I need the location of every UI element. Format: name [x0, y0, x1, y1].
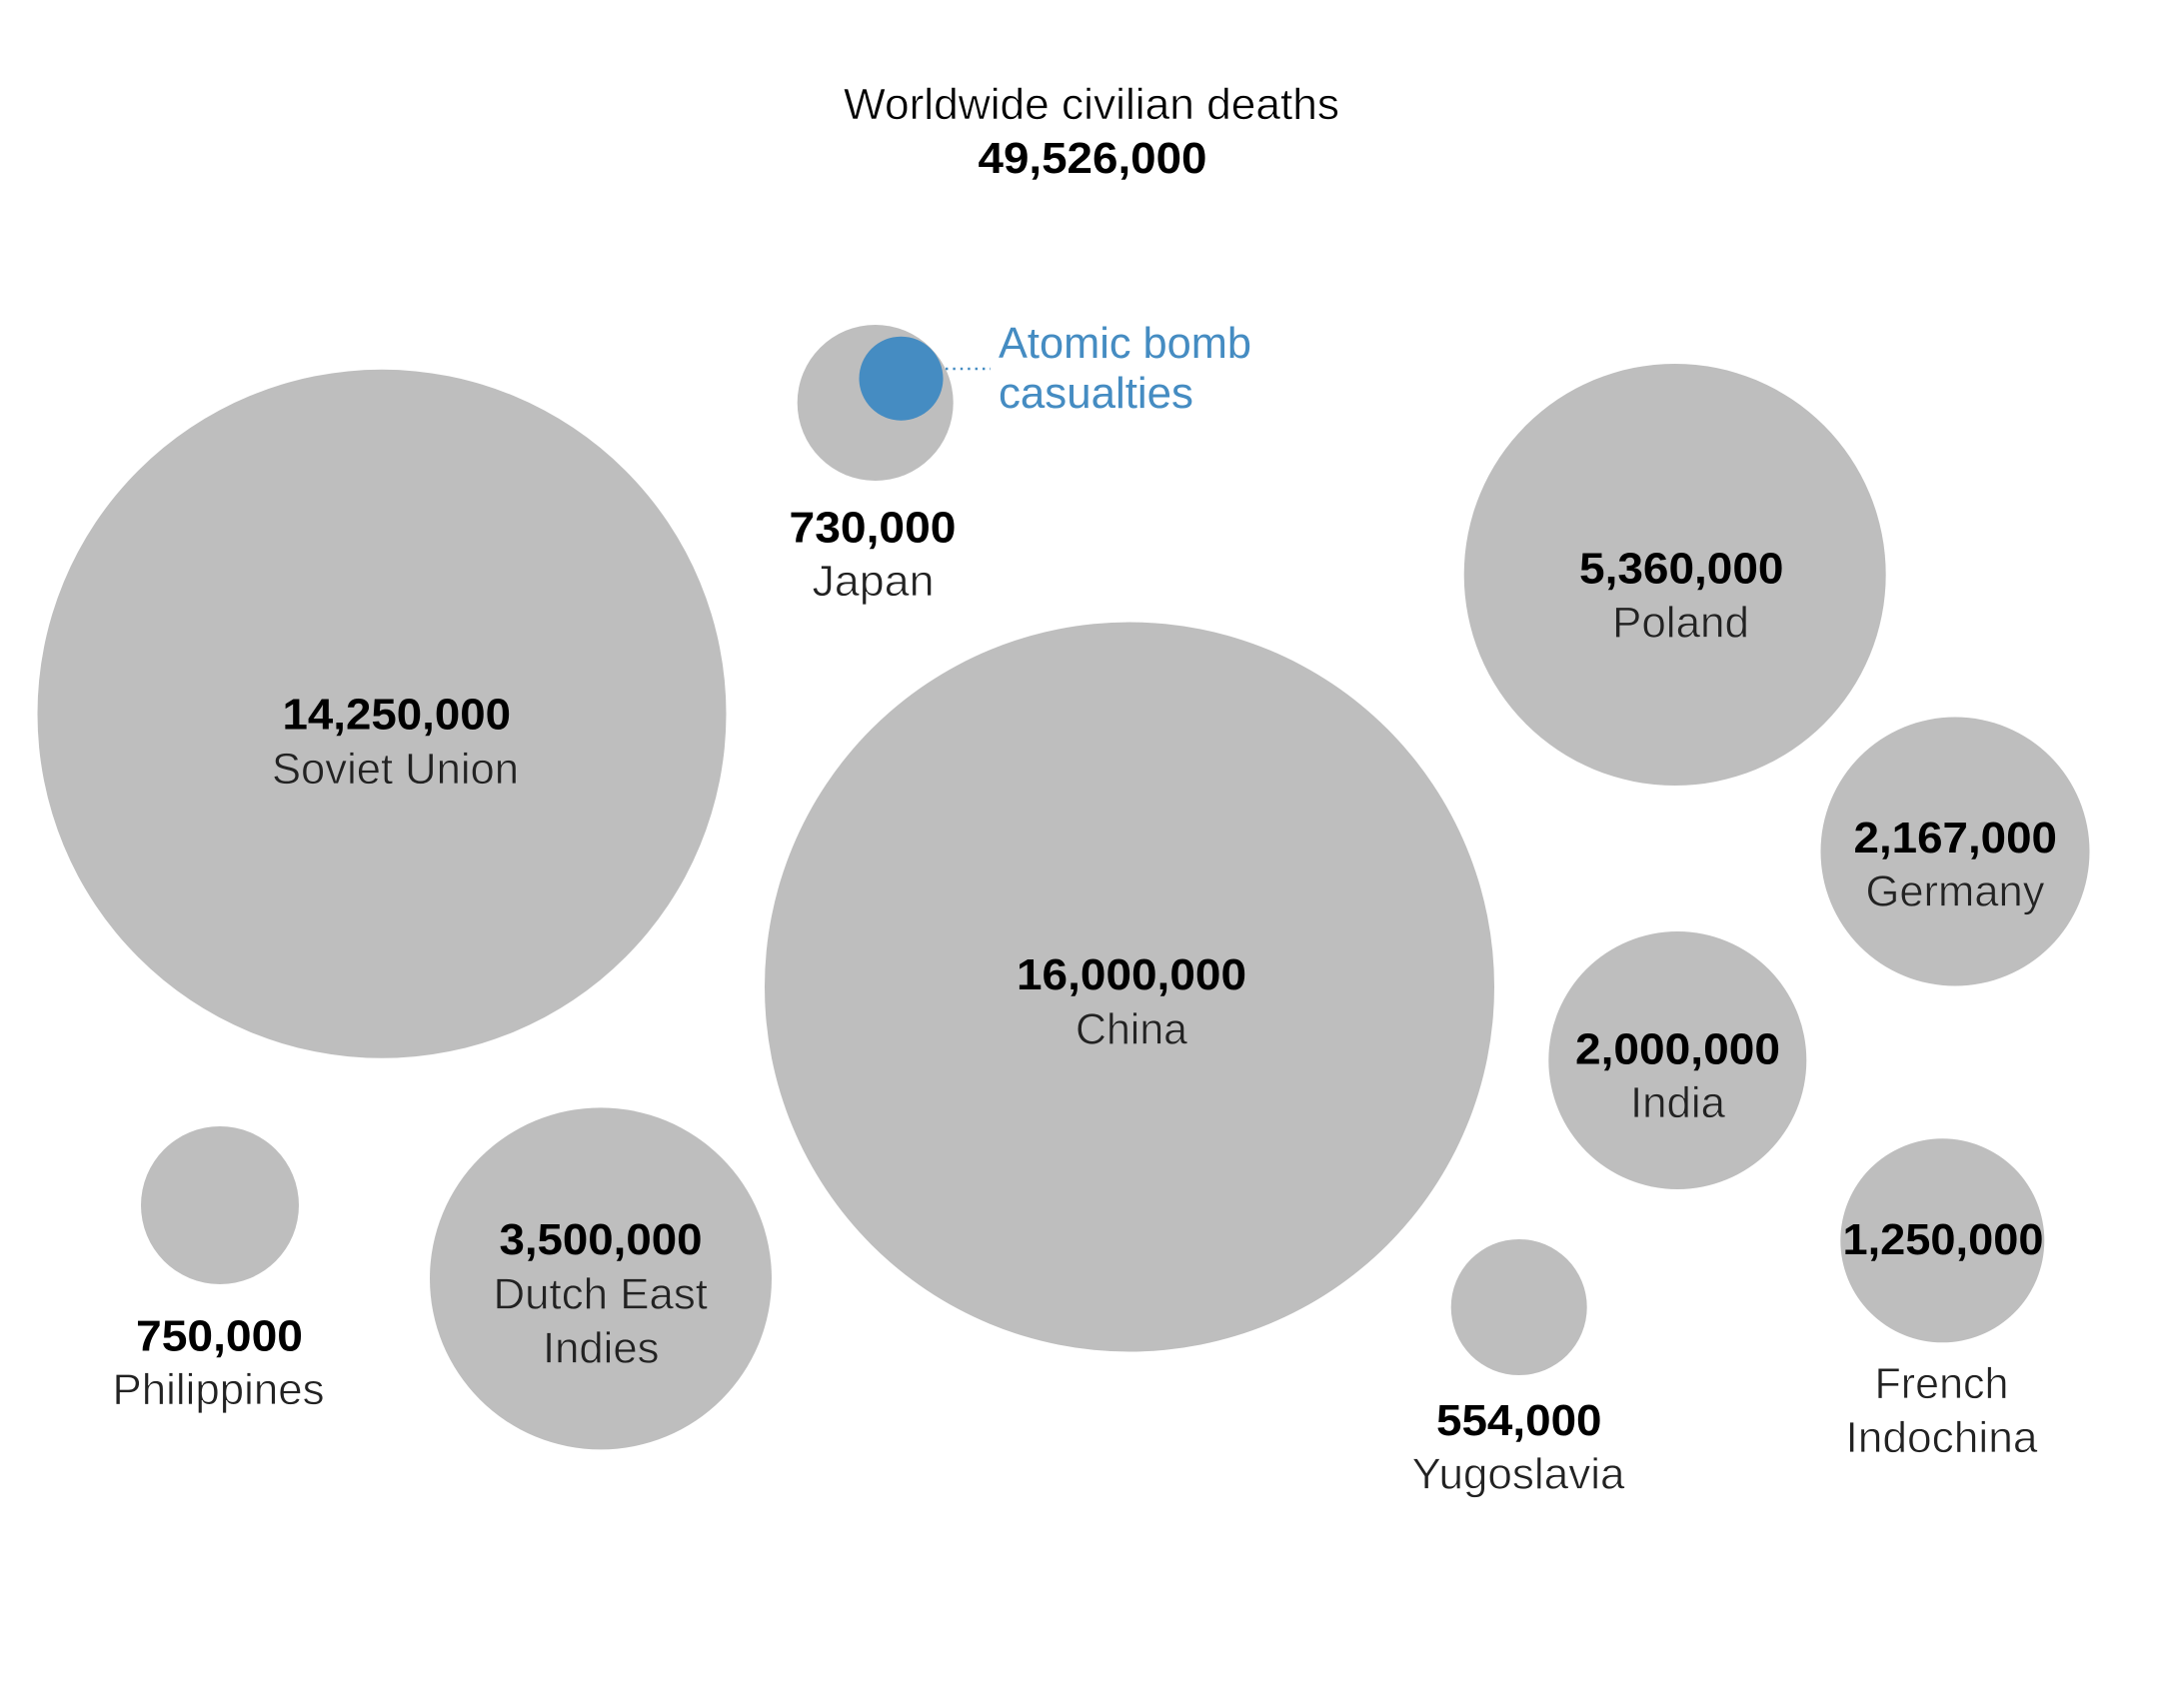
label: Soviet Union: Soviet Union: [272, 745, 519, 794]
bubble: Soviet Union: [38, 370, 726, 1058]
bubble: French Indochina: [1840, 1138, 2044, 1462]
title: 49,526,000: [978, 134, 1207, 183]
label: French Indochina: Indochina: [1845, 1413, 2038, 1462]
label: India: India: [1630, 1078, 1726, 1127]
bubble: Yugoslavia: [1411, 1239, 1625, 1499]
number: Poland: 5,360,000: [1579, 544, 1783, 594]
callout: atomic bomb casualties: [860, 319, 1251, 421]
label: Poland: Poland: [1612, 598, 1749, 648]
number: Japan: 730,000: [790, 504, 956, 552]
bubble: China: [765, 622, 1494, 1351]
label: Dutch East Indies: [494, 1269, 708, 1373]
number: Soviet Union: 14,250,000: [282, 690, 511, 740]
bubble: Dutch East Indies: [430, 1107, 772, 1449]
number: Philippines: 750,000: [136, 1311, 303, 1361]
label: French Indochina: [1845, 1359, 2038, 1462]
number: Yugoslavia: 554,000: [1436, 1396, 1601, 1445]
label: Dutch East Indies: Indies: [543, 1323, 660, 1373]
title: [844, 80, 1339, 183]
bubble: Germany: [1821, 718, 2089, 985]
callout: atomic bomb casualties: Atomic bomb: [999, 319, 1251, 368]
label: Yugoslavia: Yugoslavia: [1411, 1449, 1625, 1499]
bubble: Japan: [790, 325, 956, 606]
bubble: Philippines: [112, 1126, 324, 1414]
label: Dutch East Indies: Dutch East: [494, 1269, 708, 1319]
label: Japan: Japan: [812, 557, 934, 606]
number: China: 16,000,000: [1017, 950, 1246, 999]
label: China: China: [1076, 1005, 1188, 1053]
number: Dutch East Indies: 3,500,000: [500, 1215, 702, 1264]
number: French Indochina: 1,250,000: [1843, 1215, 2043, 1264]
bubble: Poland: [1464, 364, 1886, 786]
label: Philippines: Philippines: [112, 1365, 324, 1414]
number: India: 2,000,000: [1575, 1025, 1780, 1073]
bubble: India: [1548, 931, 1806, 1189]
title: Worldwide civilian deaths: [844, 80, 1339, 129]
number: Germany: 2,167,000: [1853, 814, 2057, 862]
label: French Indochina: French: [1875, 1359, 2009, 1408]
callout: atomic bomb casualties: casualties: [999, 369, 1193, 418]
label: Germany: Germany: [1865, 867, 2045, 915]
